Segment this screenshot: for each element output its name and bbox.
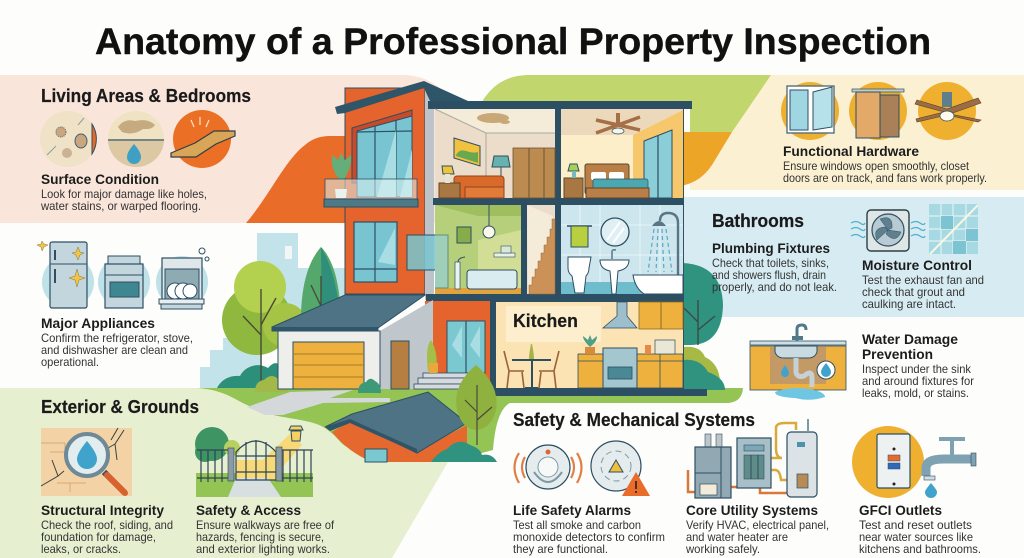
icon: core utility equipment [688,419,817,498]
panel: bathrooms background [683,197,1024,317]
icon: dishwasher [156,248,209,309]
heading: Exterior & Grounds [41,397,199,417]
life safety alarms text: monoxide detectors to confirm [513,530,665,544]
structural integrity text: foundation for damage, [41,530,156,544]
functional hardware text: Ensure windows open smoothly, closet [783,159,970,173]
structural integrity text: Structural Integrity [41,502,164,518]
icon: magnifier over cracked wall [41,428,132,496]
structural frame [426,101,692,395]
garage [272,295,425,389]
room: bathroom [561,205,683,294]
floor beam [490,389,707,396]
life safety alarms text: Life Safety Alarms [513,502,631,518]
heading: Bathrooms [712,211,804,231]
safety and access text: hazards, fencing is secure, [196,530,324,544]
core utility systems text: Verify HVAC, electrical panel, [686,518,829,532]
kitchen heading: Kitchen [513,311,578,331]
lawn [197,388,743,462]
icon: exhaust fan [851,210,925,251]
structural integrity text [41,502,173,556]
major appliances text [41,315,193,369]
plumbing fixtures text: Plumbing Fixtures [712,240,830,256]
major appliances text: and dishwasher are clean and [41,343,188,357]
gfci outlets text: near water sources like [859,530,973,544]
icon: gate and fence [195,426,313,497]
major appliances text: Confirm the refrigerator, stove, [41,331,193,345]
surface condition text: Look for major damage like holes, [41,187,207,201]
entry planter [427,340,438,373]
icon: ceiling fan [915,82,981,140]
panel: living areas background [0,75,440,223]
room: green washroom [407,205,521,294]
upper window [352,110,412,197]
annex tree [431,365,497,462]
decorative orange hill [246,136,360,223]
moisture control text: Moisture Control [862,257,972,273]
tower side wall [425,88,434,300]
moisture control text: Test the exhaust fan and [862,273,984,287]
surface condition text [40,171,207,213]
icon: window [781,82,839,140]
moisture control text: check that grout and [862,285,965,299]
functional hardware text: Functional Hardware [783,143,919,159]
plumbing fixtures text: Check that toilets, sinks, [712,256,829,270]
safety and access text: Ensure walkways are free of [196,518,335,532]
core utility systems text [685,502,829,556]
trees right [683,263,725,390]
gfci outlets text: GFCI Outlets [859,502,942,518]
lower window [354,222,397,282]
moisture control text [862,257,984,311]
entry wall [425,301,490,389]
water damage text [862,331,974,400]
icon: carbon monoxide alarm [591,441,650,496]
plumbing fixtures text: properly, and do not leak. [712,280,837,294]
gfci outlets text: kitchens and bathrooms. [859,542,981,556]
moisture control text: caulking are intact. [862,297,956,311]
structural integrity text: leaks, or cracks. [41,542,121,556]
panel: functional hardware background [690,75,1024,190]
house [272,81,707,462]
functional hardware text [783,143,987,185]
icon: refrigerator [37,241,94,308]
life safety alarms text: they are functional. [513,542,608,556]
title: Anatomy of a Professional Property Inspection [95,21,931,62]
room: staircase [527,205,555,294]
garage shrub [358,379,381,393]
section: bathrooms [712,204,984,311]
icon: damaged wall [40,111,96,167]
section: exterior and grounds [41,397,335,556]
decorative skyline [200,233,348,388]
icon: warped floorboard [171,110,235,168]
lower annex roof and wall [325,392,467,462]
water damage text: and around fixtures for [862,374,974,388]
icon: gfci outlet and faucet [852,426,976,498]
section: safety and mechanical systems [513,410,981,556]
plumbing fixtures text [712,240,837,294]
tower wall [345,88,425,294]
room: bedroom [561,109,683,198]
gfci outlets text [859,502,981,556]
plumbing fixtures text: and showers flush, drain [712,268,826,282]
functional hardware text: doors are on track, and fans work properly. [783,171,987,185]
life safety alarms text: Test all smoke and carbon [513,518,641,532]
icon: sliding closet door [849,82,907,140]
surface condition text: water stains, or warped flooring. [40,199,201,213]
panel: safety background [392,403,1024,558]
gfci outlets text: Test and reset outlets [859,518,972,532]
major appliances text: Major Appliances [41,315,155,331]
water damage text: leaks, mold, or stains. [862,386,969,400]
core utility systems text: Core Utility Systems [686,502,818,518]
decorative amber hill [680,132,732,186]
icon: tile and grout [929,204,978,254]
structural integrity text: Check the roof, siding, and [41,518,173,532]
room: attic living room [435,109,555,198]
room: kitchen [490,301,683,389]
side door [391,341,409,389]
trees left [217,247,340,392]
driveway [247,390,390,415]
water damage text: Prevention [862,346,933,362]
section: major appliances [37,241,209,369]
icon: smoke alarm [514,445,582,489]
section: functional hardware [781,82,987,185]
water damage text: Inspect under the sink [862,362,972,376]
decorative green hill [483,75,771,132]
section: living areas [40,86,251,213]
core utility systems text: and water heater are [686,530,788,544]
icon: stove [98,256,150,308]
life safety alarms text [513,502,665,556]
balcony [324,153,418,207]
side wall [380,300,433,389]
safety and access text [196,502,335,556]
surface condition text: Surface Condition [41,171,159,187]
major appliances text: operational. [41,355,99,369]
decorative window in skyline [285,246,292,259]
heading: Living Areas & Bedrooms [41,86,251,106]
safety and access text: and exterior lighting works. [196,542,330,556]
icon: under-sink leak [750,325,846,400]
icon: water stain [108,111,164,167]
water damage text: Water Damage [862,331,958,347]
entry steps [414,373,474,389]
panel: exterior background [0,388,448,558]
tower roof [335,81,468,114]
safety and access text: Safety & Access [196,502,301,518]
heading: Safety & Mechanical Systems [513,410,755,430]
core utility systems text: working safely. [685,542,760,556]
